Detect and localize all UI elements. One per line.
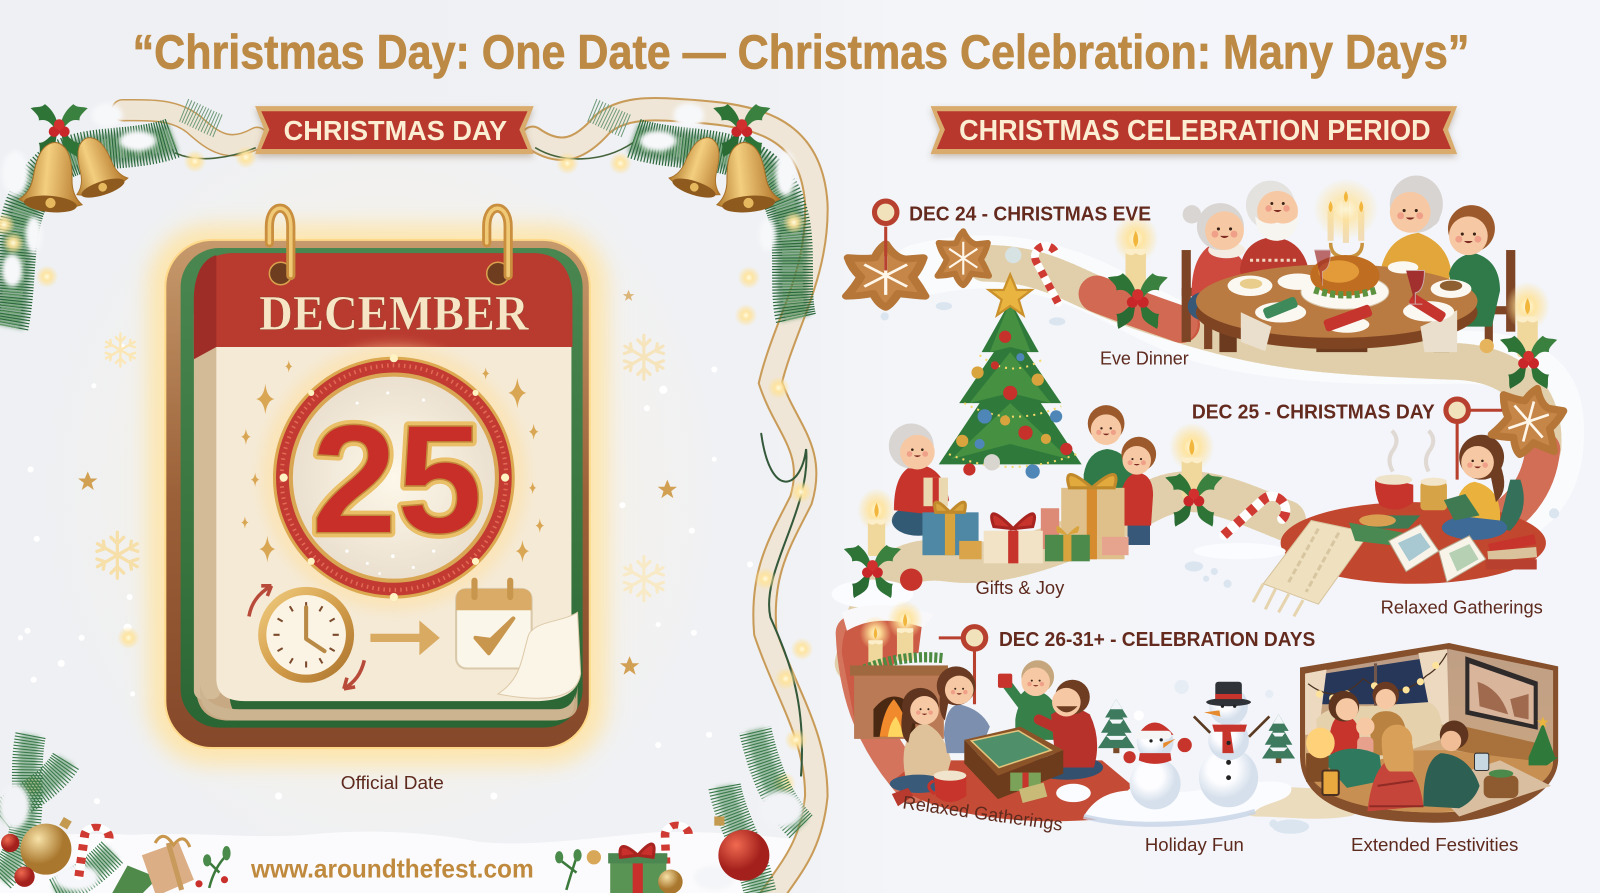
scene: path candle and holly right — [1480, 282, 1557, 389]
title: “Christmas Day: One Date — Christmas Celebration: Many Days” — [133, 26, 1469, 79]
label: Gifts and Joy: Gifts & Joy — [976, 577, 1065, 598]
arrow: clock to date — [370, 621, 440, 655]
small gifts and snow mound — [1010, 773, 1091, 803]
snow on top-right branches — [640, 103, 796, 251]
person: man green toasting — [998, 660, 1061, 740]
icon: check calendar — [456, 578, 532, 668]
person: foreground man in green — [1423, 721, 1489, 808]
tree — [939, 275, 1082, 479]
girl — [1498, 480, 1524, 531]
corner decorations: bottom left — [0, 735, 231, 893]
stacked books — [1488, 534, 1536, 554]
pin and label: Dec 26-31 — [939, 627, 1315, 704]
gold sparkles — [241, 360, 544, 562]
icon: clock — [249, 586, 364, 689]
red header — [194, 253, 572, 347]
scene: board game gathering — [890, 660, 1103, 806]
page stack — [196, 255, 578, 721]
snow bank — [0, 832, 806, 893]
scene: reading girl and mugs — [1349, 431, 1537, 582]
fairy lights — [0, 146, 813, 817]
label: Official Date: Official Date — [341, 772, 444, 793]
string lights — [1308, 653, 1447, 694]
person: foreground woman with blanket — [1367, 725, 1423, 811]
banner: Christmas Day — [255, 106, 534, 154]
pin and label: Dec 24 — [874, 201, 1151, 270]
mini tree and stool — [1484, 716, 1558, 798]
family on sofa — [1322, 682, 1406, 788]
scene: path candles and candy — [844, 423, 1291, 598]
scene: fireplace — [842, 601, 948, 739]
page — [216, 347, 581, 701]
chairs — [1182, 250, 1515, 349]
banner: celebration period — [931, 106, 1457, 154]
floor — [1305, 750, 1553, 812]
person: grandma with gift — [889, 424, 949, 536]
December text: DECEMBER — [259, 285, 529, 341]
open book — [1389, 525, 1486, 582]
candelabra — [1313, 179, 1379, 281]
sofa — [1316, 702, 1442, 760]
dining table — [1196, 250, 1478, 352]
snowman left — [1123, 710, 1192, 809]
page curl — [498, 612, 581, 698]
right wall and TV — [1449, 649, 1553, 760]
person: woman beige — [890, 688, 951, 806]
label: Eve Dinner: Eve Dinner — [1100, 347, 1189, 368]
room shell — [1300, 643, 1558, 823]
crackers — [1262, 296, 1299, 319]
cookie: Dec 25 — [1488, 380, 1569, 463]
label: Relaxed Gatherings lower: Relaxed Gatherings — [901, 791, 1064, 835]
green felt — [181, 248, 583, 728]
turkey — [1310, 255, 1380, 296]
person: small boy red — [1120, 437, 1156, 545]
website url: www.aroundthefest.com — [250, 856, 534, 884]
panel: Christmas Celebration Period — [832, 106, 1569, 855]
scene: snowmen — [1098, 680, 1295, 809]
pin and label: Dec 24: DEC 24 - CHRISTMAS EVE — [909, 203, 1151, 225]
banner: Christmas Day: CHRISTMAS DAY — [284, 115, 507, 146]
scene: extended festivities room — [1300, 643, 1558, 823]
game board table — [964, 727, 1063, 799]
calendar — [165, 208, 590, 748]
scene: scarf — [1253, 520, 1369, 616]
mug and cocoa — [929, 771, 966, 802]
corner decorations: bottom right — [555, 730, 803, 893]
label: Extended Festivities: Extended Festivities — [1351, 834, 1518, 855]
icon: holly and bells right — [666, 104, 781, 215]
snowman right — [1194, 682, 1269, 807]
snow patch — [832, 543, 1291, 824]
pine branches: top right — [592, 110, 796, 318]
diner: boy — [1448, 205, 1500, 327]
binder rings — [269, 208, 509, 285]
scene: Christmas tree and gifts — [889, 275, 1156, 563]
date circle: 25: 25 — [311, 393, 483, 566]
panel: Christmas Day — [0, 102, 816, 893]
snow pebbles — [881, 302, 1559, 834]
label: Holiday Fun: Holiday Fun — [1145, 834, 1244, 855]
scene: eve dinner — [1182, 176, 1515, 352]
pin and label: Dec 26-31: DEC 26-31+ - CELEBRATION DAYS — [999, 629, 1315, 651]
diner: grandpa — [1240, 181, 1308, 296]
icon: holly and bells left — [18, 104, 131, 215]
label: Relaxed Gatherings upper: Relaxed Gatherings — [1381, 596, 1543, 617]
person: boy in green — [1084, 405, 1133, 500]
date circle: 25: 25 — [311, 393, 483, 566]
window night sky — [1311, 655, 1445, 704]
rug: reading corner — [1281, 502, 1546, 584]
lamp and lantern — [1306, 728, 1339, 795]
curtains — [1305, 649, 1449, 735]
diner: grandma right — [1380, 176, 1451, 301]
snow and glow backdrop — [18, 102, 753, 878]
pin and label: Dec 25 — [1192, 399, 1502, 480]
date circle: 25 — [261, 345, 527, 610]
pin and label: Dec 25: DEC 25 - CHRISTMAS DAY — [1192, 401, 1435, 423]
rug: game corner — [893, 760, 1133, 821]
person: woman grey sweater — [937, 666, 990, 753]
wood base — [165, 240, 590, 748]
diner: grandma left — [1183, 203, 1255, 320]
wine glasses — [1406, 270, 1424, 304]
ribbon garland — [122, 109, 816, 893]
winding knit path — [853, 262, 1558, 803]
person: man red — [1030, 680, 1103, 780]
gifts — [922, 475, 1129, 563]
scene: Dec 24 path items — [846, 214, 1168, 329]
pine branches: top left — [8, 110, 219, 327]
decorative stars and snowflakes — [78, 290, 677, 675]
banner: celebration period: CHRISTMAS CELEBRATION PERIOD — [959, 115, 1431, 147]
snow on top-left branches — [2, 103, 156, 287]
